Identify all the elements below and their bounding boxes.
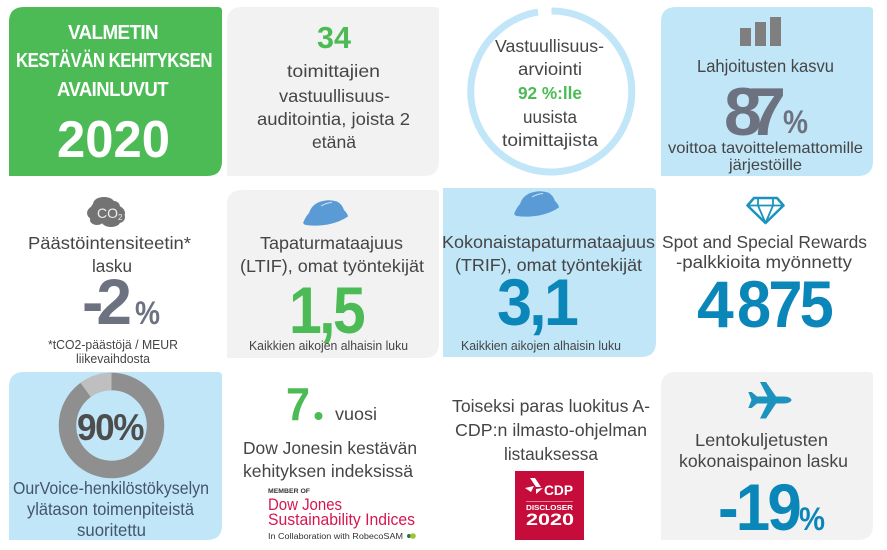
Dow Jones logo: MEMBER OF [268,489,310,495]
title text: KESTÄVÄN KEHITYKSEN [16,49,212,72]
CDP logo: CDP [544,483,573,498]
air freight heading [679,430,848,471]
donations figure: % [783,104,808,140]
assessment text [495,36,604,150]
rewards heading: Spot and Special Rewards [662,232,867,252]
LTIF heading: (LTIF), omat työntekijät [240,256,424,276]
CDP text: listauksessa [504,444,598,464]
Dow Jones logo: Sustainability Indices [268,511,415,529]
icon: hard hat [303,200,348,226]
assessment text: arviointi [518,59,582,79]
Dow Jones rank: 7 [286,378,310,430]
audits text: toimittajien [287,61,380,81]
icon: hard hat [514,191,559,217]
title text [16,22,212,101]
donations text: järjestöille [728,157,802,174]
donations figure: 87 [724,74,786,150]
Dow Jones text: Dow Jonesin kestävän [243,438,417,458]
emissions heading [28,233,191,276]
air freight figure: -19 [718,470,800,544]
panel: Dow Jones [243,378,417,541]
donations text: voittoa tavoittelemattomille [668,140,863,157]
panel: title [9,7,222,176]
rewards figure: 875 [737,267,832,341]
assessment text: 92 %:lle [518,83,582,103]
LTIF note: Kaikkien aikojen alhaisin luku [249,339,408,353]
air freight heading: Lentokuljetusten [695,430,828,450]
rewards figure [697,267,832,341]
panel: emissions intensity [28,197,191,366]
OurVoice text: OurVoice-henkilöstökyselyn [13,478,209,498]
Dow Jones text [243,438,417,481]
TRIF heading [442,232,655,275]
panel: LTIF [227,190,439,358]
assessment text: toimittajista [502,130,598,150]
OurVoice text: suoritettu [77,520,146,540]
air freight figure: % [799,501,825,537]
emissions heading: Päästöintensiteetin* [28,233,191,253]
donations heading: Lahjoitusten kasvu [697,56,834,76]
TRIF figure: 3,1 [497,265,577,339]
icon: CO2 cloud [87,197,125,227]
rewards figure: 4 [697,267,734,341]
donut chart [68,382,156,470]
audits text: etänä [312,132,356,152]
Dow Jones logo: Dow Jones [268,496,342,514]
panel: air freight [661,372,873,544]
icon: airplane [748,382,792,418]
rewards heading [662,232,867,272]
assessment text: Vastuullisuus- [495,36,604,56]
CDP logo: DISCLOSER [526,503,574,512]
panel: donations [661,7,873,176]
CDP text [452,396,650,464]
audits text [257,61,410,152]
TRIF heading: (TRIF), omat työntekijät [455,255,642,275]
CDP logo: 2020 [526,510,574,529]
audits number: 34 [317,20,352,55]
emissions figure [82,266,160,338]
title text: VALMETIN [68,22,158,44]
LTIF heading [240,233,424,276]
CDP text: Toiseksi paras luokitus A- [452,396,650,416]
donut value: 90% [77,407,144,448]
LTIF heading: Tapaturmataajuus [260,233,403,253]
panel: assessment ring [471,11,632,172]
ring chart [471,11,632,172]
Dow Jones logo: In Collaboration with RobecoSAM [268,532,403,541]
icon: bar chart [740,17,781,46]
emissions footnote: liikevaihdosta [76,352,150,366]
title year: 2020 [57,111,170,169]
audits text: auditointia, joista 2 [257,109,410,129]
panel: CDP [452,396,650,540]
icon: CO2 cloud: CO [97,205,118,221]
panel: audits [227,7,439,176]
panel: OurVoice [9,372,222,540]
Dow Jones rank: vuosi [335,404,377,424]
LTIF figure: 1,5 [289,273,364,347]
emissions figure: % [135,295,160,331]
title text: AVAINLUVUT [57,79,168,101]
TRIF heading: Kokonaistapaturmataajuus [442,232,655,252]
CDP text: CDP:n ilmasto-ohjelman [455,420,647,440]
donations text [668,140,863,174]
OurVoice text [13,478,209,540]
emissions heading: lasku [92,256,132,276]
emissions figure: -2 [82,266,132,338]
emissions footnote [48,338,178,366]
CDP logo [515,471,584,540]
rewards heading: -palkkioita myönnetty [676,252,852,272]
assessment text: uusista [523,107,577,127]
panel: rewards [662,198,867,341]
Dow Jones logo [268,489,416,541]
panel: TRIF [442,188,656,357]
icon: CO2 cloud: 2 [118,213,123,222]
air freight heading: kokonaispainon lasku [679,451,848,471]
icon: diamond [748,198,784,223]
OurVoice text: ylätason toimenpiteistä [27,499,194,519]
Dow Jones rank [286,378,377,430]
audits text: vastuullisuus- [279,86,390,106]
Dow Jones text: kehityksen indeksissä [243,461,413,481]
emissions footnote: *tCO2-päästöjä / MEUR [48,338,178,352]
TRIF note: Kaikkien aikojen alhaisin luku [461,339,621,353]
